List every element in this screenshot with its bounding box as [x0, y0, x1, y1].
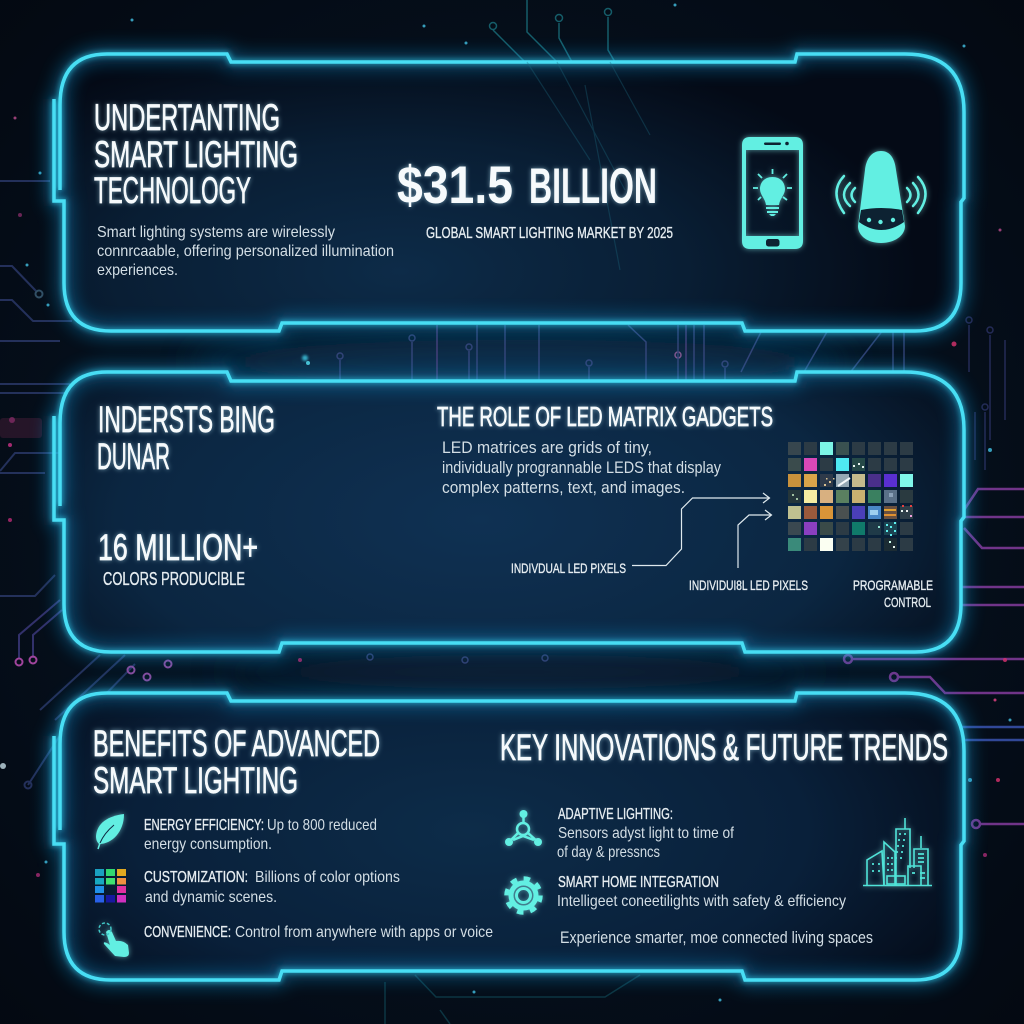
convenience text: Control from anywhere with apps or voice — [235, 924, 493, 941]
description: individually progrannable LEDS that display — [442, 458, 721, 477]
description: LED matrices are grids of tiny, — [442, 438, 652, 457]
description: Smart lighting systems are wirelessly — [97, 224, 335, 241]
description: complex patterns, text, and images. — [442, 478, 685, 497]
callout label: programmable control — [853, 577, 933, 610]
callout label: INDIVIDUI8L LED PIXELS — [689, 577, 808, 593]
customization text — [144, 869, 400, 906]
market size stat: BILLION — [529, 158, 657, 214]
description — [442, 438, 721, 497]
market size stat: $31.5 — [397, 156, 513, 215]
heading: LED matrix gadgets: THE ROLE OF LED MATRIX GADGETS — [437, 401, 773, 432]
icon: smart speaker — [836, 151, 926, 243]
icon: smart city — [863, 818, 932, 886]
icon: touch hand — [99, 923, 129, 957]
customization text: CUSTOMIZATION: — [144, 869, 248, 886]
heading: DUNAR — [97, 436, 170, 477]
adaptive lighting text: ADAPTIVE LIGHTING: — [558, 806, 673, 823]
energy efficiency text: energy consumption. — [144, 836, 272, 853]
heading: TECHNOLOGY — [94, 170, 251, 211]
convenience text — [144, 924, 493, 941]
icon: leaf — [96, 814, 124, 849]
heading: benefits — [93, 723, 380, 801]
icon: color grid — [95, 869, 126, 902]
icon: phone with bulb — [742, 137, 803, 249]
heading: SMART LIGHTING — [94, 134, 298, 175]
market size stat — [397, 156, 657, 215]
callout label: INDIVDUAL LED PIXELS — [511, 560, 626, 576]
heading — [97, 399, 275, 477]
adaptive lighting text — [557, 806, 734, 861]
arrow: second pixel callout — [738, 510, 772, 568]
callout label: programmable control: CONTROL — [884, 594, 931, 610]
panel: LED matrix — [54, 372, 964, 652]
closing line: Experience smarter, moe connected living spaces — [560, 929, 873, 947]
convenience text: CONVENIENCE: — [144, 924, 231, 941]
heading — [94, 97, 298, 211]
panel: understanding smart lighting — [54, 54, 964, 331]
adaptive lighting text: of day & pressncs — [557, 844, 660, 861]
description: experiences. — [97, 262, 178, 279]
heading: benefits: BENEFITS OF ADVANCED — [93, 723, 380, 764]
LED matrix grid — [788, 442, 913, 551]
adaptive lighting text: Sensors adyst light to time of — [558, 825, 734, 842]
callout label: programmable control: PROGRAMABLE — [853, 577, 933, 593]
heading: benefits: SMART LIGHTING — [93, 760, 298, 801]
smart home text: SMART HOME INTEGRATION — [558, 874, 719, 891]
colors stat — [98, 527, 258, 589]
stat caption: GLOBAL SMART LIGHTING MARKET BY 2025 — [426, 225, 673, 242]
customization text: and dynamic scenes. — [145, 889, 277, 906]
energy efficiency text: Up to 800 reduced — [267, 817, 377, 834]
description: connrcaable, offering personalized illumination — [97, 243, 394, 260]
customization text: Billions of color options — [255, 869, 400, 886]
energy efficiency text — [144, 817, 377, 853]
smart home text — [557, 874, 846, 910]
arrow: first pixel callout — [632, 493, 770, 566]
smart home text: Intelligeet coneetilights with safety & efficiency — [557, 893, 846, 910]
icon: adaptive network — [505, 810, 542, 846]
panel: benefits and innovations — [54, 693, 964, 980]
colors stat: COLORS PRODUCIBLE — [103, 569, 245, 589]
description — [97, 224, 394, 279]
energy efficiency text: ENERGY EFFICIENCY: — [144, 817, 264, 834]
heading: UNDERTANTING — [94, 97, 280, 138]
colors stat: 16 MILLION+ — [98, 527, 258, 568]
icon: gear — [506, 878, 540, 912]
heading: INDERSTS BING — [98, 399, 275, 440]
